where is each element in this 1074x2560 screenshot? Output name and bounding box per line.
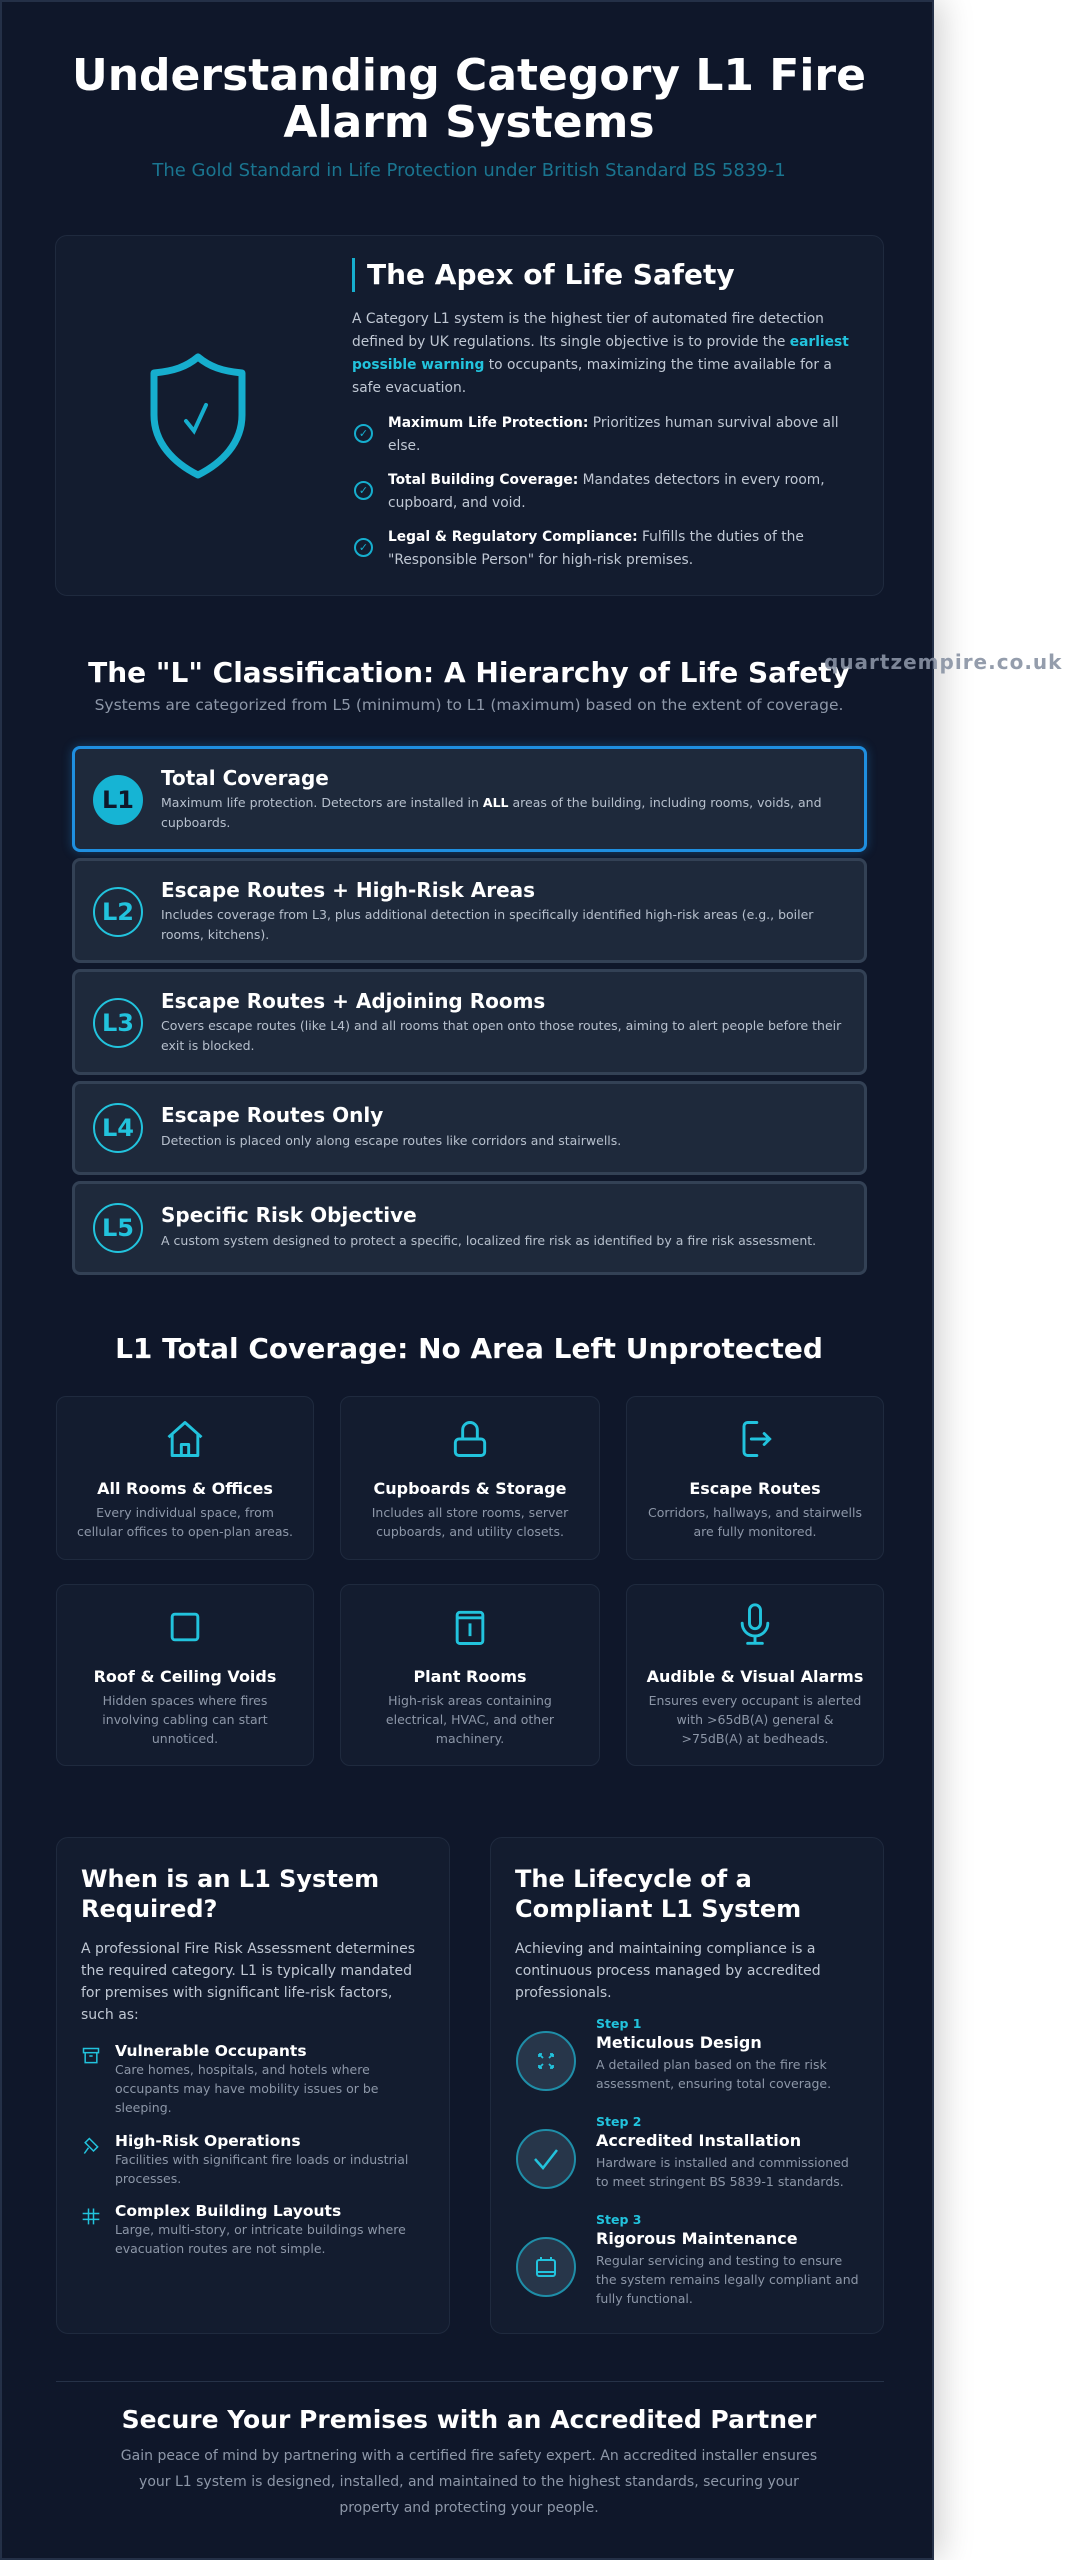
- card: L1: Maximum life protection. Detectors are installed in ALL areas of the building, including rooms, voids, and cupboards.: [161, 795, 822, 830]
- card: voids: [56, 1584, 314, 1766]
- step 1: Step 1: [596, 2016, 641, 2031]
- footer text: Gain peace of mind by partnering with a certified fire safety expert. An accredited installer ensures your L1 system is designed, installed, and maintained to the highest standards, securing your property and protecting your people.: [121, 2448, 817, 2516]
- footer heading: Secure Your Premises with an Accredited Partner: [122, 2405, 816, 2434]
- item: high-risk operations: [84, 2132, 408, 2186]
- heading: when: When is an L1 System Required?: [81, 1865, 379, 1923]
- card: cupboards: [340, 1396, 600, 1560]
- bullet: maximum life protection: ✓: [359, 427, 368, 440]
- panel: apex of life safety: [55, 235, 884, 596]
- card: L5: A custom system designed to protect a specific, localized fire risk as identified by a fire risk assessment.: [161, 1233, 816, 1248]
- step 1: Meticulous Design: [596, 2033, 762, 2052]
- card: L5: [72, 1181, 867, 1275]
- card: L3: L3: [102, 1009, 134, 1037]
- card: all rooms: [56, 1396, 314, 1560]
- bullet list: [354, 415, 839, 568]
- step 2: Accredited Installation: [596, 2131, 801, 2150]
- item: vulnerable occupants: Care homes, hospitals, and hotels where occupants may have mobility issues or be sleeping.: [115, 2062, 379, 2115]
- item: vulnerable occupants: Vulnerable Occupants: [115, 2042, 307, 2060]
- watermark: quartzempire.co.uk: [824, 650, 1062, 674]
- card: L5: Specific Risk Objective: [161, 1203, 417, 1227]
- card: L4: Detection is placed only along escape routes like corridors and stairwells.: [161, 1133, 621, 1148]
- icon: panel: [456, 1610, 484, 1645]
- subtitle: The Gold Standard in Life Protection under British Standard BS 5839-1: [152, 160, 786, 181]
- card: L4: [72, 1081, 867, 1175]
- icon: shield with check: [150, 353, 246, 478]
- card: L2: Escape Routes + High-Risk Areas: [161, 878, 535, 902]
- card: L3: [72, 969, 867, 1075]
- step 3: [516, 2212, 859, 2306]
- card: voids: Hidden spaces where fires involving cabling can start unnoticed.: [102, 1693, 268, 1746]
- bullet: legal compliance: ✓: [359, 541, 368, 554]
- step 3: Regular servicing and testing to ensure the system remains legally compliant and fully functional.: [596, 2253, 859, 2306]
- card: escape routes: [626, 1396, 884, 1560]
- card: L4: Escape Routes Only: [161, 1103, 383, 1127]
- subheading: L classification: Systems are categorized from L5 (minimum) to L1 (maximum) based on the extent of coverage.: [95, 696, 843, 714]
- card: cupboards: Cupboards & Storage: [374, 1479, 566, 1498]
- icon: lock: [454, 1421, 486, 1457]
- panel: lifecycle: [490, 1837, 884, 2334]
- card: cupboards: Includes all store rooms, server cupboards, and utility closets.: [372, 1505, 568, 1539]
- step 2: [516, 2114, 849, 2189]
- icon: house: [168, 1421, 202, 1457]
- card: L1: [72, 746, 867, 852]
- step 3: Step 3: [596, 2212, 641, 2227]
- intro text: when: A professional Fire Risk Assessment determines the required category. L1 is typically mandated for premises with significant life-risk factors, such as:: [81, 1941, 415, 2023]
- step 2: Step 2: [596, 2114, 641, 2129]
- card: voids: Roof & Ceiling Voids: [94, 1667, 276, 1686]
- card: L3: Escape Routes + Adjoining Rooms: [161, 989, 545, 1013]
- card: plant rooms: [340, 1584, 600, 1766]
- icon: microphone: [740, 1603, 770, 1645]
- heading: L classification: The "L" Classification: A Hierarchy of Life Safety: [88, 656, 850, 689]
- item: complex layouts: [82, 2202, 406, 2256]
- card: alarms: [626, 1584, 884, 1766]
- bullet: total building coverage: ✓: [359, 484, 368, 497]
- card: alarms: Ensures every occupant is alerted with >65dB(A) general & >75dB(A) at bedheads.: [649, 1693, 861, 1746]
- card: L3: Covers escape routes (like L4) and all rooms that open onto those routes, aiming to alert people before their exit is blocked.: [161, 1018, 841, 1053]
- card: plant rooms: High-risk areas containing electrical, HVAC, and other machinery.: [386, 1693, 554, 1746]
- heading: lifecycle: The Lifecycle of a Compliant L1 System: [515, 1865, 801, 1923]
- step 2: Hardware is installed and commissioned to meet stringent BS 5839-1 standards.: [596, 2155, 849, 2189]
- intro text: lifecycle: Achieving and maintaining compliance is a continuous process managed by accredited professionals.: [515, 1941, 821, 2001]
- step 3: Rigorous Maintenance: [596, 2229, 798, 2248]
- item: high-risk operations: Facilities with significant fire loads or industrial processes.: [115, 2152, 408, 2186]
- panel: when is L1 required: [56, 1837, 450, 2334]
- card: escape routes: Escape Routes: [689, 1479, 821, 1498]
- bullet: legal compliance: Legal & Regulatory Compliance: Fulfills the duties of the "Responsible Person" for high-risk premises.: [388, 529, 804, 568]
- icon: square: [170, 1612, 200, 1642]
- card: alarms: Audible & Visual Alarms: [647, 1667, 863, 1686]
- step 1: [516, 2016, 831, 2091]
- card: plant rooms: Plant Rooms: [413, 1667, 527, 1686]
- title: Alarm Systems: [283, 97, 655, 148]
- card: L1: Total Coverage: [161, 766, 329, 790]
- card: all rooms: All Rooms & Offices: [97, 1479, 273, 1498]
- item: complex layouts: Complex Building Layouts: [115, 2202, 341, 2220]
- bullet: maximum life protection: Maximum Life Protection: Prioritizes human survival above all else.: [388, 415, 839, 454]
- item: high-risk operations: High-Risk Operations: [115, 2132, 301, 2150]
- card: L4: L4: [102, 1114, 134, 1142]
- card: L2: L2: [102, 898, 134, 926]
- item: complex layouts: Large, multi-story, or intricate buildings where evacuation routes are not simple.: [115, 2222, 406, 2256]
- title: [72, 50, 866, 148]
- bullet: total building coverage: Total Building Coverage: Mandates detectors in every room, cupboard, and void.: [388, 472, 825, 511]
- card: escape routes: Corridors, hallways, and stairwells are fully monitored.: [648, 1505, 862, 1539]
- card: L5: L5: [102, 1214, 134, 1242]
- icon: exit: [742, 1421, 772, 1457]
- card: L2: [72, 858, 867, 963]
- heading: total coverage: L1 Total Coverage: No Area Left Unprotected: [115, 1332, 823, 1365]
- card: L2: Includes coverage from L3, plus additional detection in specifically identified high-risk areas (e.g., boiler rooms, kitchens).: [161, 907, 813, 942]
- item: vulnerable occupants: [82, 2042, 379, 2115]
- card: L1: L1: [102, 786, 134, 814]
- heading: apex: The Apex of Life Safety: [367, 258, 735, 291]
- step 1: A detailed plan based on the fire risk assessment, ensuring total coverage.: [596, 2057, 831, 2091]
- intro text: A Category L1 system is the highest tier of automated fire detection defined by UK regulations. Its single objective is to provide the earliest possible warning to occupants, maximizing the time available for a safe evacuation.: [352, 311, 849, 396]
- card: all rooms: Every individual space, from cellular offices to open-plan areas.: [77, 1505, 293, 1539]
- title: Understanding Category L1 Fire: [72, 50, 866, 101]
